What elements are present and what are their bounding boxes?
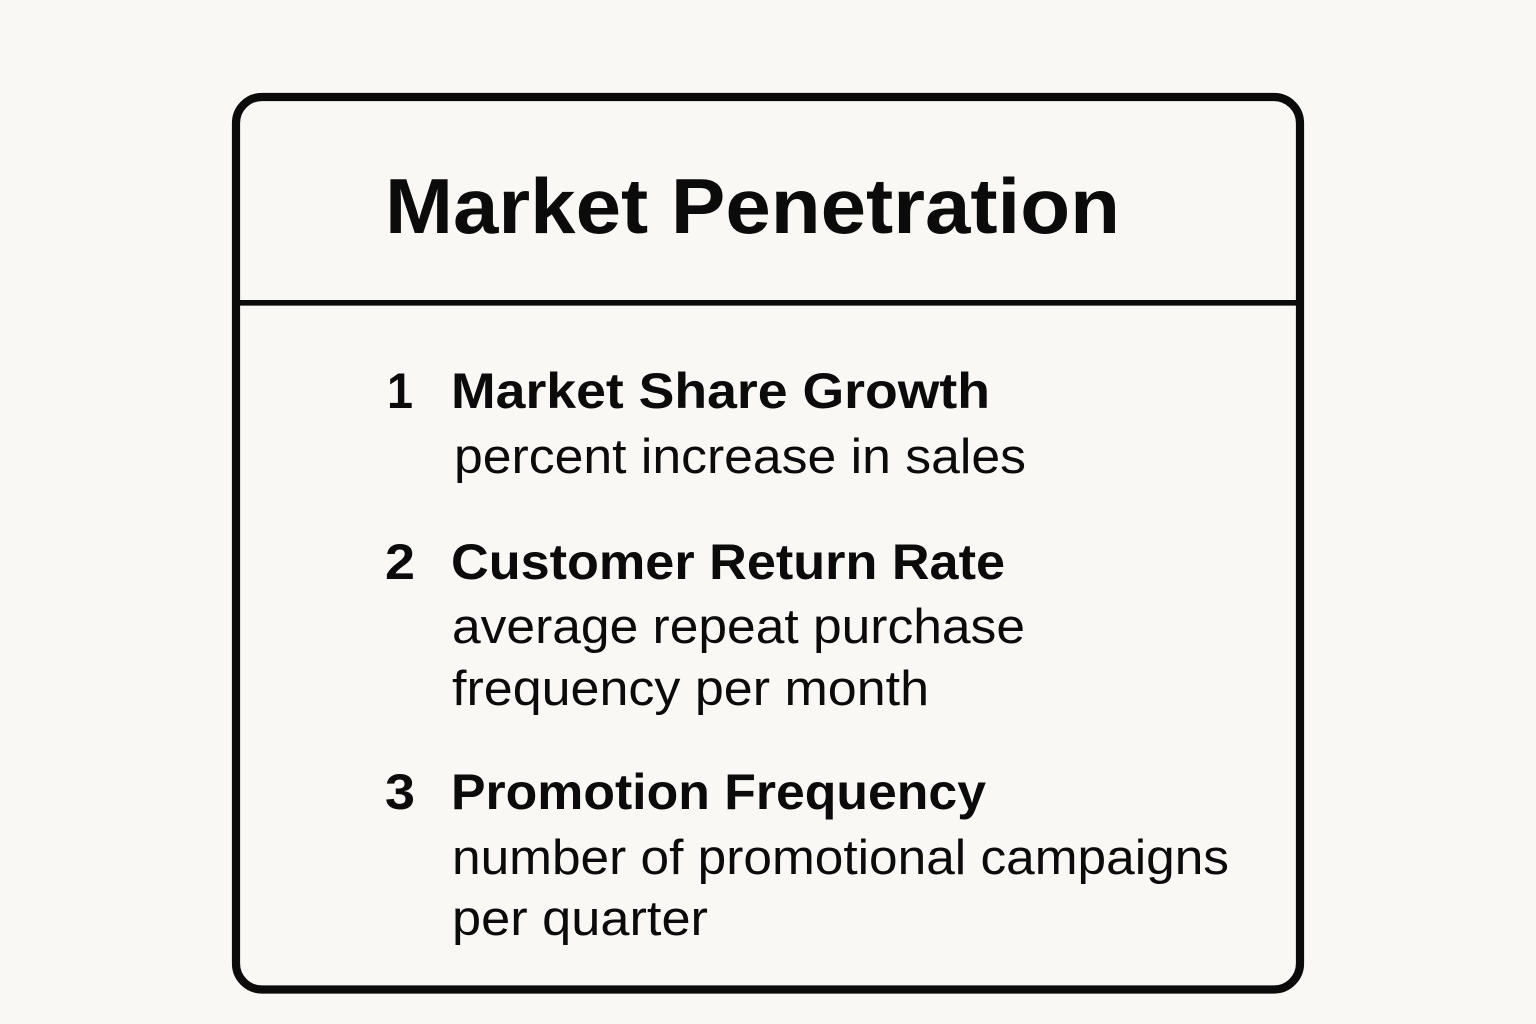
item 3: promotion frequency (385, 764, 1229, 946)
item 1: market share growth: percent increase in sales (454, 430, 1026, 484)
item 2: customer return rate: average repeat purchase (452, 600, 1025, 654)
item 1: market share growth: Market Share Growth (451, 363, 990, 419)
panel: market penetration card (236, 97, 1300, 990)
item 3: promotion frequency: number of promotional campaigns (452, 831, 1229, 885)
title: Market Penetration (385, 162, 1120, 250)
item 2: customer return rate: frequency per month (452, 662, 929, 716)
item 1: market share growth (387, 363, 1026, 484)
item 1: market share growth: 1 (387, 363, 413, 419)
item 2: customer return rate (385, 534, 1025, 716)
item 3: promotion frequency: 3 (385, 764, 415, 820)
item 3: promotion frequency: per quarter (452, 892, 708, 946)
item 3: promotion frequency: Promotion Frequency (451, 764, 986, 820)
item 2: customer return rate: 2 (385, 534, 415, 590)
item 2: customer return rate: Customer Return Rate (451, 534, 1005, 590)
